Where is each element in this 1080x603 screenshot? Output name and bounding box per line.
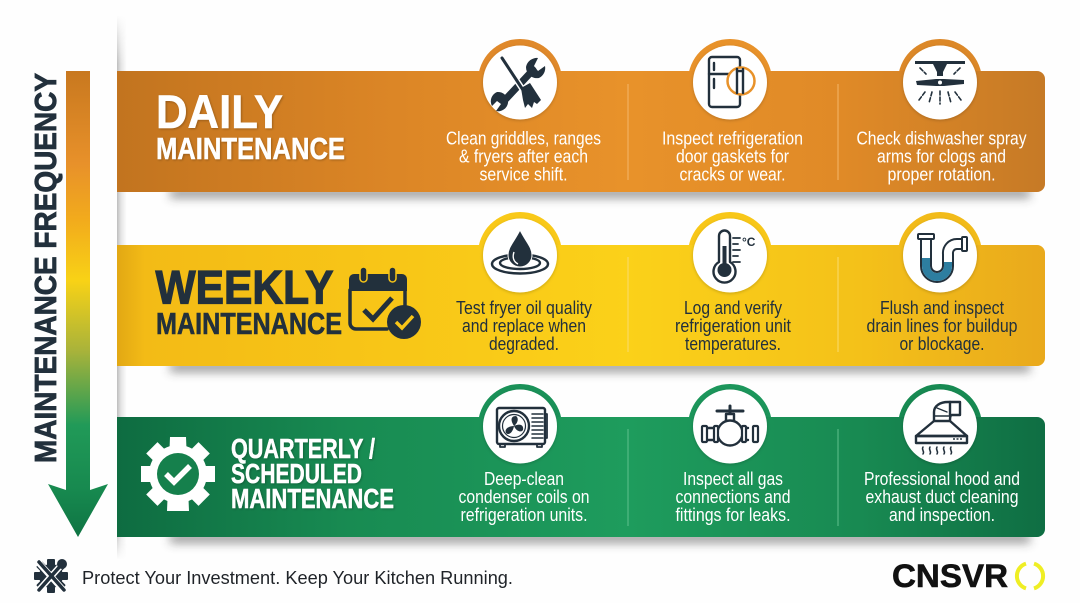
text: gas connections: fittings for leaks. xyxy=(676,504,790,525)
icon: refrigerator gasket xyxy=(693,46,767,120)
text: fryer oil: and replace when xyxy=(462,315,586,336)
icon: thermometer: °C xyxy=(742,235,756,249)
heading: weekly: MAINTENANCE xyxy=(156,306,342,341)
heading: quarterly: QUARTERLY / xyxy=(231,433,375,464)
text: temperatures xyxy=(675,297,791,354)
text: drain lines: or blockage. xyxy=(900,333,984,354)
heading: quarterly: SCHEDULED xyxy=(231,458,362,489)
heading: weekly: WEEKLY xyxy=(156,260,334,314)
text: dishwasher xyxy=(856,128,1027,184)
text: gaskets: Inspect refrigeration xyxy=(662,128,803,148)
text: hood cleaning: and inspection. xyxy=(889,504,995,525)
text: gaskets xyxy=(662,128,803,184)
text: griddles: service shift. xyxy=(480,164,568,184)
icon: thermometer xyxy=(693,218,767,292)
text: dishwasher: Check dishwasher spray xyxy=(856,128,1027,148)
text: condenser coils: Deep-clean xyxy=(484,468,564,489)
icon: dishwasher spray arm xyxy=(903,46,977,120)
icon: condenser unit xyxy=(483,390,557,464)
text: fryer oil: degraded. xyxy=(489,333,559,354)
arrow: maintenance frequency xyxy=(48,71,108,537)
icon: gas valve xyxy=(693,390,767,464)
text: gas connections: Inspect all gas xyxy=(683,468,783,489)
icon: drain pipe xyxy=(903,218,977,292)
text: drain lines xyxy=(866,297,1018,354)
panel: daily maintenance xyxy=(117,39,1045,198)
text: fryer oil xyxy=(456,297,593,354)
text: griddles: Clean griddles, ranges xyxy=(446,128,601,148)
text: temperatures: Log and verify xyxy=(684,297,783,318)
heading: quarterly: MAINTENANCE xyxy=(231,483,394,514)
text: dishwasher: proper rotation. xyxy=(888,164,996,184)
text: griddles xyxy=(446,128,601,184)
text: gas connections: connections and xyxy=(676,486,790,507)
logo: CNSVR: CNSVR xyxy=(892,558,1008,594)
text: drain lines: drain lines for buildup xyxy=(866,315,1018,336)
heading: daily xyxy=(156,85,345,166)
icon: calendar with check xyxy=(349,267,421,339)
text: condenser coils: condenser coils on xyxy=(458,486,590,507)
icon: oil drop xyxy=(483,218,557,292)
text: hood cleaning: Professional hood and xyxy=(864,468,1020,489)
text: hood cleaning: exhaust duct cleaning xyxy=(866,486,1018,507)
text: griddles: & fryers after each xyxy=(459,146,588,166)
axis label: maintenance frequency: MAINTENANCE FREQUENCY xyxy=(28,73,63,463)
icon: gear with check xyxy=(141,437,215,511)
text: condenser coils: refrigeration units. xyxy=(460,504,588,525)
text: temperatures: temperatures. xyxy=(685,333,781,354)
text: temperatures: refrigeration unit xyxy=(675,315,791,336)
text: gas connections xyxy=(676,468,790,525)
panel: weekly maintenance xyxy=(117,212,1045,372)
text: fryer oil: Test fryer oil quality xyxy=(456,297,593,318)
text: gaskets: cracks or wear. xyxy=(680,164,786,184)
text: drain lines: Flush and inspect xyxy=(880,297,1004,318)
panel: quarterly maintenance xyxy=(117,384,1045,543)
text: hood cleaning xyxy=(864,468,1020,525)
text: condenser coils xyxy=(458,468,590,525)
text: gaskets: door gaskets for xyxy=(676,146,789,166)
text: dishwasher: arms for clogs and xyxy=(877,146,1006,166)
heading: daily: DAILY xyxy=(156,85,283,138)
icon: footer tools and gear xyxy=(34,559,68,593)
heading: daily: MAINTENANCE xyxy=(156,131,345,166)
heading: weekly xyxy=(156,260,342,341)
icon: wrench and broom xyxy=(483,46,557,120)
icon: exhaust hood xyxy=(903,390,977,464)
heading: quarterly xyxy=(231,433,394,514)
tagline: Protect Your Investment. Keep Your Kitchen Running. xyxy=(82,567,513,588)
